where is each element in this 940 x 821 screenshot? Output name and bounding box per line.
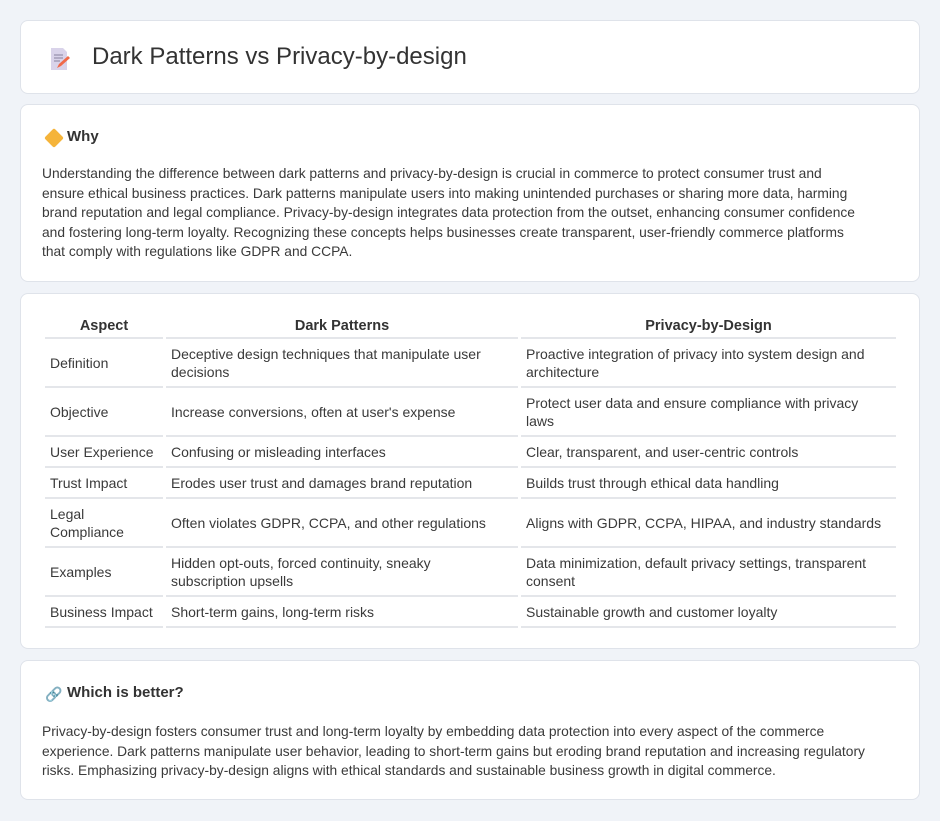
panel: which is better <box>20 660 920 800</box>
table: Aligns with GDPR, CCPA, HIPAA, and industry standards <box>526 514 881 530</box>
table: Erodes user trust and damages brand reputation <box>171 474 472 490</box>
table: Objective <box>50 404 108 420</box>
table: Sustainable growth and customer loyalty <box>526 604 777 620</box>
panel: comparison table <box>20 293 920 649</box>
table: Proactive integration of privacy into system design and architecture <box>526 346 865 380</box>
text: why: ensure ethical business practices. Dark patterns manipulate users into making unintended purchases or sharing more data, harming <box>42 186 847 200</box>
text: why: Understanding the difference between dark patterns and privacy-by-design is crucial in commerce to protect consumer trust and <box>42 166 822 181</box>
table: Builds trust through ethical data handling <box>526 474 779 490</box>
table: Protect user data and ensure compliance with privacy <box>526 394 858 410</box>
table: Aspect <box>80 318 128 334</box>
heading: why: Why <box>67 128 99 145</box>
table: Increase conversions, often at user's expense <box>171 404 455 420</box>
text: which is better: experience. Dark patterns manipulate user behavior, leading to short-term gains but eroding brand reputation and increasing regulatory <box>42 744 865 758</box>
table: Short-term gains, long-term risks <box>171 604 374 620</box>
icon: link: 🔗 <box>45 686 62 702</box>
text: why <box>42 166 855 259</box>
table: laws <box>526 412 554 428</box>
table: Deceptive design techniques that manipulate user decisions <box>171 346 481 380</box>
title: Dark Patterns vs Privacy-by-design <box>92 43 467 70</box>
table: Trust Impact <box>50 474 127 490</box>
header card <box>20 20 920 94</box>
table: subscription upsells <box>171 572 293 588</box>
text: why: and fostering long-term loyalty. Recognizing these concepts helps businesses create transparent, user-friendly commerce platforms <box>42 224 844 240</box>
icon: document pencil <box>51 48 70 70</box>
table: Business Impact <box>50 604 153 620</box>
table: Legal Compliance <box>50 506 124 540</box>
text: why: brand reputation and legal compliance. Privacy-by-design integrates data protection from the outset, enhancing consumer confidence <box>42 205 855 220</box>
table: Hidden opt-outs, forced continuity, sneaky <box>171 554 431 570</box>
text: which is better <box>42 724 865 778</box>
table: Clear, transparent, and user-centric controls <box>526 444 798 460</box>
table: Confusing or misleading interfaces <box>171 444 386 460</box>
table <box>45 318 896 628</box>
table: Dark Patterns <box>295 318 389 334</box>
table: Often violates GDPR, CCPA, and other regulations <box>171 514 486 530</box>
text: which is better: Privacy-by-design fosters consumer trust and long-term loyalty by embedding data protection into every aspect of the commerce <box>42 724 824 739</box>
text: which is better: risks. Emphasizing privacy-by-design aligns with ethical standards and sustainable business growth in digital commerce. <box>42 763 776 778</box>
table: User Experience <box>50 444 154 460</box>
table: Data minimization, default privacy settings, transparent consent <box>526 554 866 588</box>
text: why: that comply with regulations like GDPR and CCPA. <box>42 244 352 259</box>
panel: why <box>20 104 920 282</box>
heading: which is better: Which is better? <box>67 684 184 701</box>
icon: diamond <box>44 128 64 148</box>
table: Examples <box>50 564 111 580</box>
table: Definition <box>50 354 108 370</box>
table: Privacy-by-Design <box>645 318 772 334</box>
